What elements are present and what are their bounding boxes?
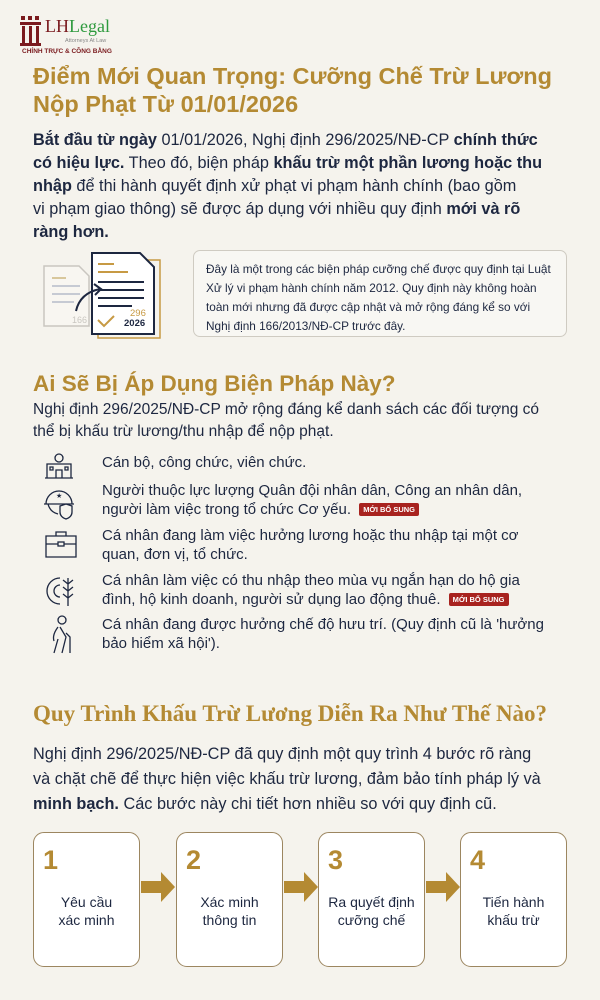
arrow 2	[284, 872, 318, 902]
item 4: đình, hộ kinh doanh, người sử dụng lao động thuê.	[102, 591, 441, 608]
item 2	[44, 482, 522, 520]
icon: briefcase	[45, 531, 77, 558]
item 5: Cá nhân đang được hưởng chế độ hưu trí. (Quy định cũ là 'hưởng	[102, 616, 544, 633]
logo: Attorneys At Law	[65, 38, 106, 44]
intro paragraph: Bắt đầu từ ngày 01/01/2026, Nghị định 296/2025/NĐ-CP chính thức	[33, 131, 538, 149]
step 4: Tiến hành	[483, 894, 544, 910]
text: who intro: Nghị định 296/2025/NĐ-CP mở rộng đáng kể danh sách các đối tượng có	[33, 401, 539, 418]
step 2: 2	[186, 845, 201, 875]
icon: elderly	[52, 615, 71, 654]
step 3: Ra quyết định	[328, 894, 415, 910]
callout: toàn mới nhưng đã được cập nhật và mở rộng đáng kể so với	[206, 300, 530, 314]
item 4: MỚI BỔ SUNG	[453, 595, 504, 604]
title: Nộp Phạt Từ 01/01/2026	[33, 91, 298, 117]
icon: documents illustration	[43, 252, 161, 339]
text: process intro: Nghị định 296/2025/NĐ-CP đã quy định một quy trình 4 bước rõ ràng	[33, 745, 531, 763]
item 3: quan, đơn vị, tổ chức.	[102, 546, 248, 563]
intro paragraph: vi phạm giao thông) sẽ được áp dụng với nhiều quy định mới và rõ	[33, 200, 520, 218]
icon: documents illustration: 2026	[124, 318, 145, 329]
item 2: MỚI BỔ SUNG	[363, 505, 415, 514]
text: who intro: thể bị khấu trừ lương/thu nhập để nộp phạt.	[33, 423, 334, 440]
step 1: Yêu cầu	[61, 894, 112, 910]
list: subjects	[44, 453, 544, 654]
logo	[20, 16, 112, 55]
step 3: 3	[328, 845, 343, 875]
item 4: Cá nhân làm việc có thu nhập theo mùa vụ ngắn hạn do hộ gia	[102, 572, 520, 589]
item 3	[45, 527, 518, 563]
item 2: người làm việc trong tổ chức Cơ yếu.	[102, 501, 351, 518]
item 2: Người thuộc lực lượng Quân đội nhân dân, Công an nhân dân,	[102, 482, 522, 499]
callout: Nghị định 166/2013/NĐ-CP trước đây.	[206, 319, 405, 333]
callout: Xử lý vi phạm hành chính năm 2012. Quy định này không hoàn	[206, 281, 537, 295]
heading: process: Quy Trình Khấu Trừ Lương Diễn Ra Như Thế Nào?	[33, 701, 547, 726]
item 4	[46, 572, 520, 608]
text: process intro: và chặt chẽ để thực hiện việc khấu trừ lương, đảm bảo tính pháp lý và	[33, 770, 541, 788]
icon: documents illustration: 296	[130, 308, 146, 319]
item 1	[45, 453, 306, 479]
title: Điểm Mới Quan Trọng: Cưỡng Chế Trừ Lương	[33, 63, 552, 89]
title	[33, 63, 552, 117]
intro paragraph	[33, 130, 542, 241]
callout: Đây là một trong các biện pháp cưỡng chế được quy định tại Luật	[206, 262, 551, 276]
callout	[193, 250, 567, 337]
intro paragraph: nhập để thi hành quyết định xử phạt vi phạm hành chính (bao gồm	[33, 177, 516, 195]
step 2: thông tin	[203, 912, 256, 928]
item 5	[52, 615, 544, 654]
icon: documents illustration: 166	[72, 315, 87, 325]
step 1: 1	[43, 845, 58, 875]
heading: who: Ai Sẽ Bị Áp Dụng Biện Pháp Này?	[33, 371, 396, 396]
step 2	[176, 832, 283, 967]
text: who intro	[33, 401, 539, 440]
logo: LHLegal	[45, 16, 110, 36]
intro paragraph: có hiệu lực. Theo đó, biện pháp khấu trừ một phần lương hoặc thu	[33, 154, 542, 172]
logo: CHÍNH TRỰC & CÔNG BẰNG	[22, 46, 112, 55]
step 3: cưỡng chế	[338, 912, 405, 928]
icon: helmet shield: ★	[56, 492, 62, 500]
icon: gear wheat	[46, 577, 74, 606]
step 4: 4	[470, 845, 485, 875]
arrow 3	[426, 872, 460, 902]
step 4	[460, 832, 567, 967]
item 1: Cán bộ, công chức, viên chức.	[102, 454, 306, 471]
icon: helmet shield	[44, 490, 74, 520]
text: process intro: minh bạch. Các bước này chi tiết hơn nhiều so với quy định cũ.	[33, 795, 497, 813]
icon: building	[45, 453, 73, 479]
step 1	[33, 832, 140, 967]
text: process intro	[33, 745, 541, 813]
step 1: xác minh	[58, 912, 115, 928]
step 4: khấu trừ	[487, 912, 540, 928]
intro paragraph: ràng hơn.	[33, 223, 109, 241]
arrow 1	[141, 872, 175, 902]
item 3: Cá nhân đang làm việc hưởng lương hoặc thu nhập tại một cơ	[102, 527, 518, 544]
step 2: Xác minh	[200, 894, 259, 910]
item 5: bảo hiểm xã hội').	[102, 635, 220, 652]
step 3	[318, 832, 425, 967]
